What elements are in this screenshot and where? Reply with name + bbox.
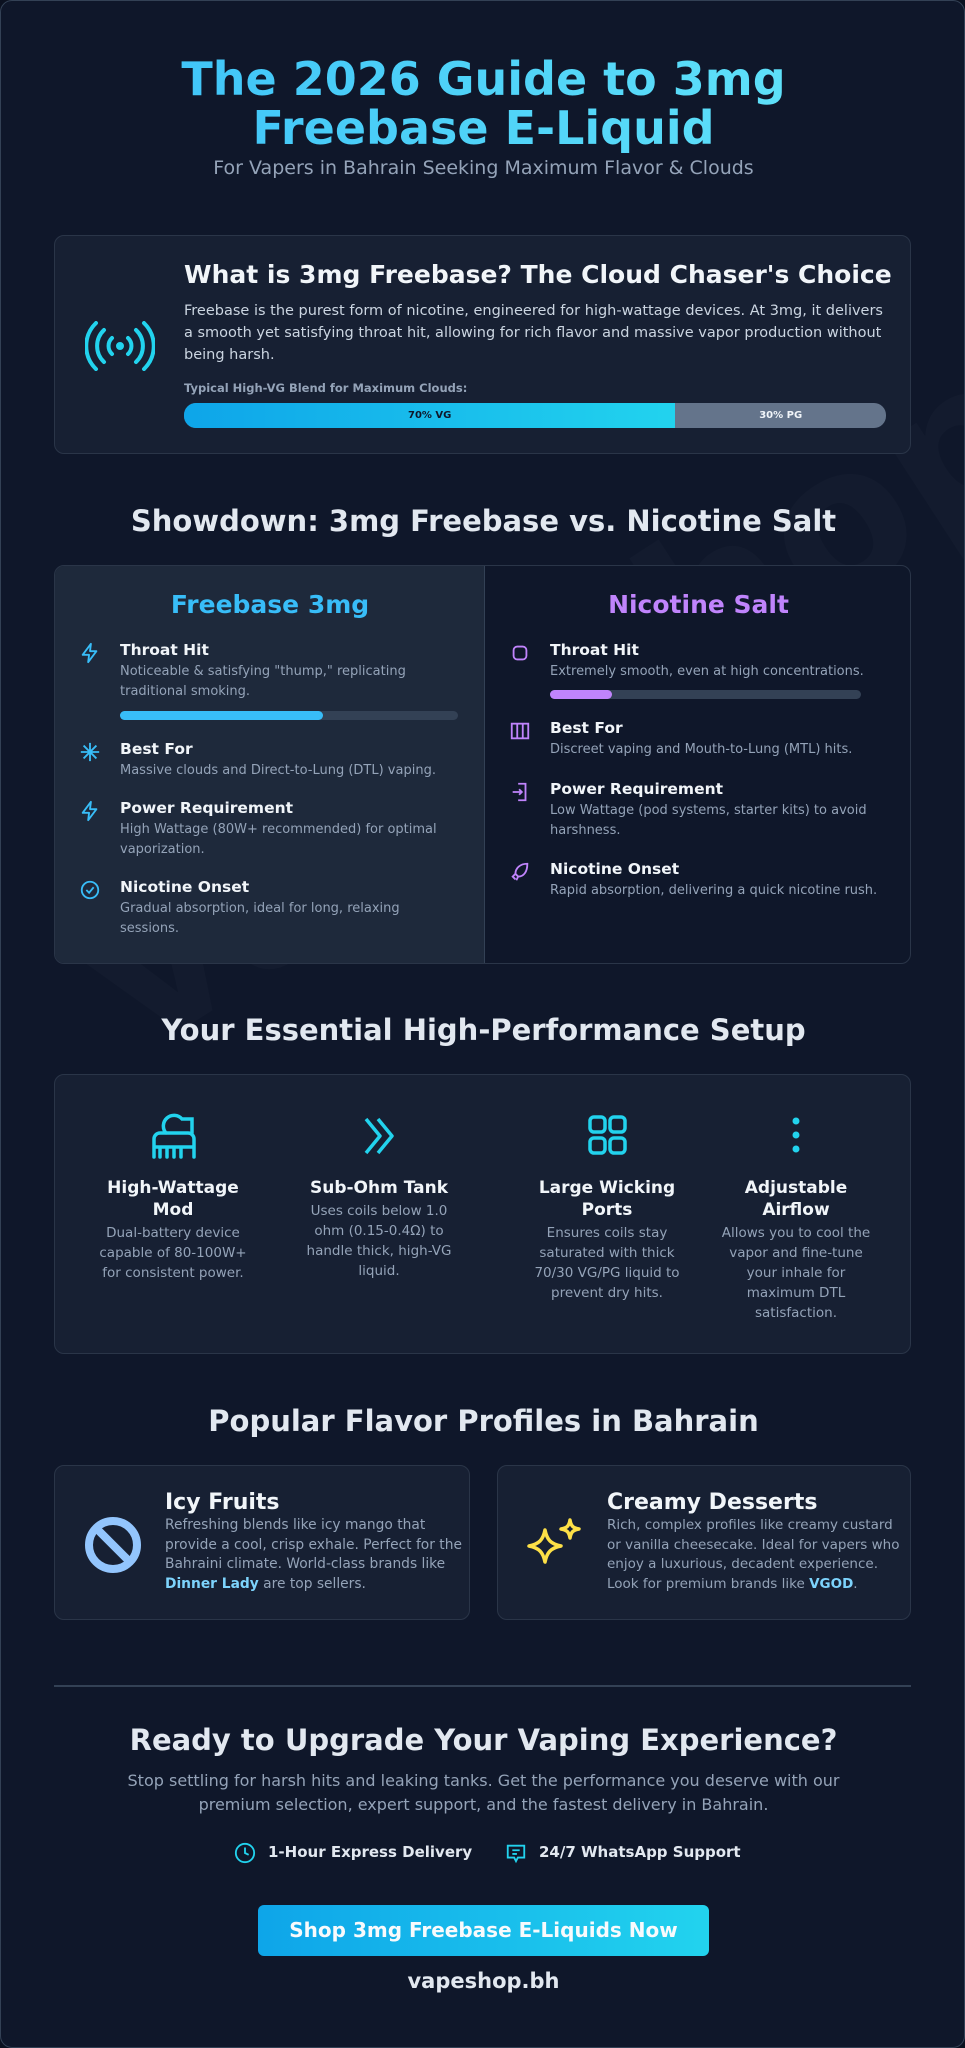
- text: Rich, complex profiles like creamy custard or vanilla cheesecake. Ideal for vapers who enjoy a luxurious, decadent experience. Look for premium brands like VGOD.: [607, 1517, 899, 1592]
- label: Typical High-VG Blend for Maximum Clouds:: [184, 381, 467, 395]
- item: onset: [80, 878, 400, 936]
- footer: brand: vapeshop.bh: [407, 1969, 560, 1993]
- heading: Nicotine Salt: [608, 590, 789, 619]
- icon: broadcast: [85, 321, 155, 371]
- item: tank: Sub-Ohm Tank: [310, 1178, 448, 1198]
- item: airflow: Allows you to cool the vapor and fine-tune your inhale for maximum DTL satisfaction.: [722, 1225, 870, 1321]
- bar chart: VG/PG: 70% VG: [408, 410, 451, 421]
- panel: icy fruits: [54, 1465, 470, 1620]
- item: best for: Massive clouds and Direct-to-Lung (DTL) vaping.: [120, 763, 436, 778]
- item: throat hit: [512, 641, 864, 699]
- item: power: Power Requirement: [550, 780, 723, 798]
- item: onset: [511, 860, 877, 898]
- bar chart: VG/PG: [184, 403, 886, 428]
- heading: showdown: Showdown: 3mg Freebase vs. Nicotine Salt: [131, 504, 836, 538]
- item: power: Low Wattage (pod systems, starter kits) to avoid harshness.: [550, 803, 867, 838]
- heading: flavors: Popular Flavor Profiles in Bahrain: [208, 1404, 759, 1438]
- item: power: Power Requirement: [120, 799, 293, 817]
- heading: What is 3mg Freebase? The Cloud Chaser's Choice: [184, 260, 892, 289]
- item: onset: Nicotine Onset: [550, 860, 679, 878]
- panel: what is 3mg freebase: [54, 235, 911, 454]
- item: ports: Large Wicking: [539, 1178, 675, 1198]
- item: throat hit: Throat Hit: [120, 641, 209, 659]
- text: Creamy Desserts: [607, 1490, 817, 1515]
- item: mod: [99, 1114, 247, 1281]
- item: power: [82, 799, 437, 857]
- badge: delivery: [234, 1842, 472, 1864]
- item: throat hit: [82, 641, 458, 720]
- item: mod: Dual-battery device capable of 80-100W+ for consistent power.: [99, 1225, 247, 1281]
- cta paragraph: Stop settling for harsh hits and leaking tanks. Get the performance you deserve with our premium selection, expert support, and the fastest delivery in Bahrain.: [128, 1771, 839, 1814]
- item: best for: Best For: [550, 719, 623, 737]
- item: throat hit: Throat Hit: [550, 641, 639, 659]
- panel: salt column: [510, 590, 877, 898]
- item: airflow: [722, 1118, 870, 1321]
- heading: setup: Your Essential High-Performance Setup: [161, 1013, 806, 1047]
- text: Icy Fruits: [165, 1490, 280, 1515]
- item: ports: [534, 1115, 680, 1301]
- panel: setup: [54, 1074, 911, 1354]
- paragraph: Freebase is the purest form of nicotine, engineered for high-wattage devices. At 3mg, it delivers a smooth yet satisfying throat hit, allowing for rich flavor and massive vapor production without being harsh.: [184, 303, 883, 363]
- bar chart: VG/PG: 30% PG: [759, 410, 802, 421]
- item: onset: Nicotine Onset: [120, 878, 249, 896]
- item: airflow: Airflow: [762, 1200, 830, 1220]
- heading: cta: Ready to Upgrade Your Vaping Experience?: [130, 1723, 837, 1757]
- text: 1-Hour Express Delivery: [268, 1843, 472, 1861]
- item: best for: [510, 719, 852, 757]
- item: mod: Mod: [153, 1200, 193, 1220]
- item: onset: Rapid absorption, delivering a quick nicotine rush.: [550, 883, 877, 898]
- item: best for: Best For: [120, 740, 193, 758]
- title: Freebase E-Liquid: [252, 101, 715, 155]
- button: shop: Shop 3mg Freebase E-Liquids Now: [289, 1918, 678, 1942]
- badge: whatsapp: [506, 1843, 741, 1864]
- item: ports: Ports: [582, 1200, 632, 1220]
- title: [1, 55, 965, 153]
- item: ports: Ensures coils stay saturated with thick 70/30 VG/PG liquid to prevent dry hits.: [534, 1225, 680, 1301]
- heading: Freebase 3mg: [171, 590, 369, 619]
- item: best for: [80, 740, 436, 778]
- text: 24/7 WhatsApp Support: [539, 1843, 741, 1861]
- subtitle: For Vapers in Bahrain Seeking Maximum Flavor & Clouds: [213, 157, 754, 179]
- item: power: [512, 780, 867, 838]
- button: shop: [258, 1905, 709, 1956]
- item: airflow: Adjustable: [745, 1178, 847, 1198]
- item: tank: Uses coils below 1.0 ohm (0.15-0.4Ω) to handle thick, high-VG liquid.: [307, 1203, 451, 1279]
- panel: creamy desserts: [497, 1465, 911, 1620]
- item: throat hit: Extremely smooth, even at high concentrations.: [550, 664, 864, 679]
- icon: no sign: [85, 1517, 141, 1573]
- item: best for: Discreet vaping and Mouth-to-Lung (MTL) hits.: [550, 742, 852, 757]
- panel: comparison: [54, 565, 911, 964]
- title: The 2026 Guide to 3mg: [181, 52, 786, 106]
- item: throat hit: Noticeable & satisfying "thump," replicating traditional smoking.: [120, 664, 406, 699]
- text: Refreshing blends like icy mango that provide a cool, crisp exhale. Perfect for the Bahraini climate. World-class brands like Dinner Lady are top sellers.: [165, 1517, 462, 1592]
- icon: sparkles: [527, 1518, 581, 1564]
- panel: freebase column: [80, 590, 458, 936]
- item: tank: [307, 1118, 451, 1279]
- item: power: High Wattage (80W+ recommended) for optimal vaporization.: [120, 822, 437, 857]
- item: mod: High-Wattage: [107, 1178, 239, 1198]
- item: onset: Gradual absorption, ideal for long, relaxing sessions.: [120, 901, 400, 936]
